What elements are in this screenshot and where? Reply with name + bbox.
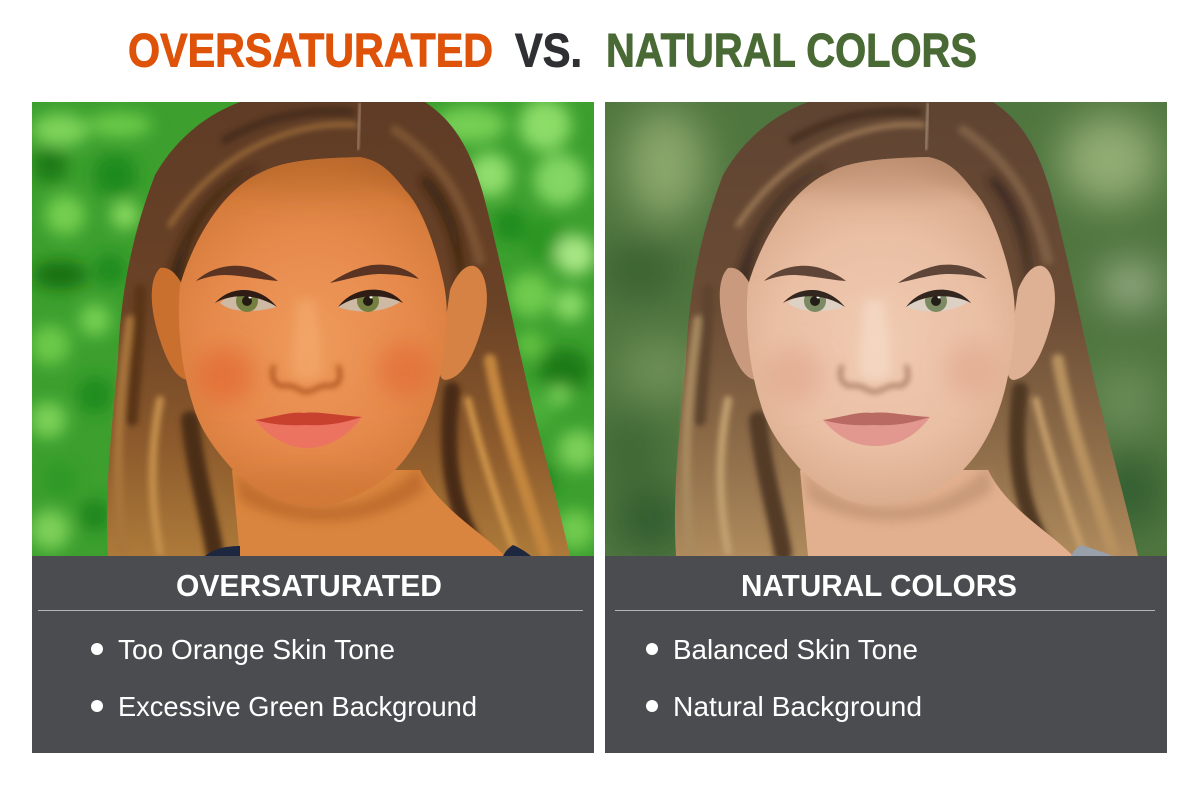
- eyes: [783, 290, 971, 312]
- lips: [823, 413, 930, 446]
- face: [179, 157, 447, 506]
- nose: [272, 300, 340, 392]
- panel: natural caption: [605, 556, 1167, 753]
- nose: [840, 300, 908, 392]
- bullet: skin tone: Too Orange Skin Tone: [118, 634, 395, 665]
- face shading: [768, 157, 995, 400]
- hair: [107, 102, 570, 556]
- eyebrows: [764, 265, 987, 283]
- bullet: background: Excessive Green Background: [118, 691, 477, 722]
- face: [747, 157, 1015, 506]
- title: [128, 24, 977, 76]
- eyebrows: [196, 265, 419, 283]
- ears: [720, 266, 1055, 380]
- lips: [255, 413, 362, 448]
- panel: oversaturated photo: [30, 99, 598, 556]
- title: OVERSATURATED: [128, 24, 493, 76]
- heading: OVERSATURATED: [176, 568, 442, 603]
- title: NATURAL COLORS: [606, 24, 977, 76]
- neck and shoulders: [205, 465, 531, 556]
- title: VS.: [515, 24, 582, 76]
- saturated green background: [30, 99, 598, 556]
- hair: [675, 102, 1138, 556]
- muted green background: [600, 102, 1167, 556]
- neck and shoulders: [800, 465, 1113, 556]
- heading: NATURAL COLORS: [741, 568, 1017, 603]
- panel: natural photo: [600, 102, 1167, 556]
- panel: oversaturated caption: [32, 556, 594, 753]
- face shading: [194, 157, 433, 406]
- bullet: skin tone: Balanced Skin Tone: [673, 634, 918, 665]
- bullet: background: Natural Background: [673, 691, 922, 722]
- ears: [152, 268, 186, 380]
- eyes: [215, 290, 403, 312]
